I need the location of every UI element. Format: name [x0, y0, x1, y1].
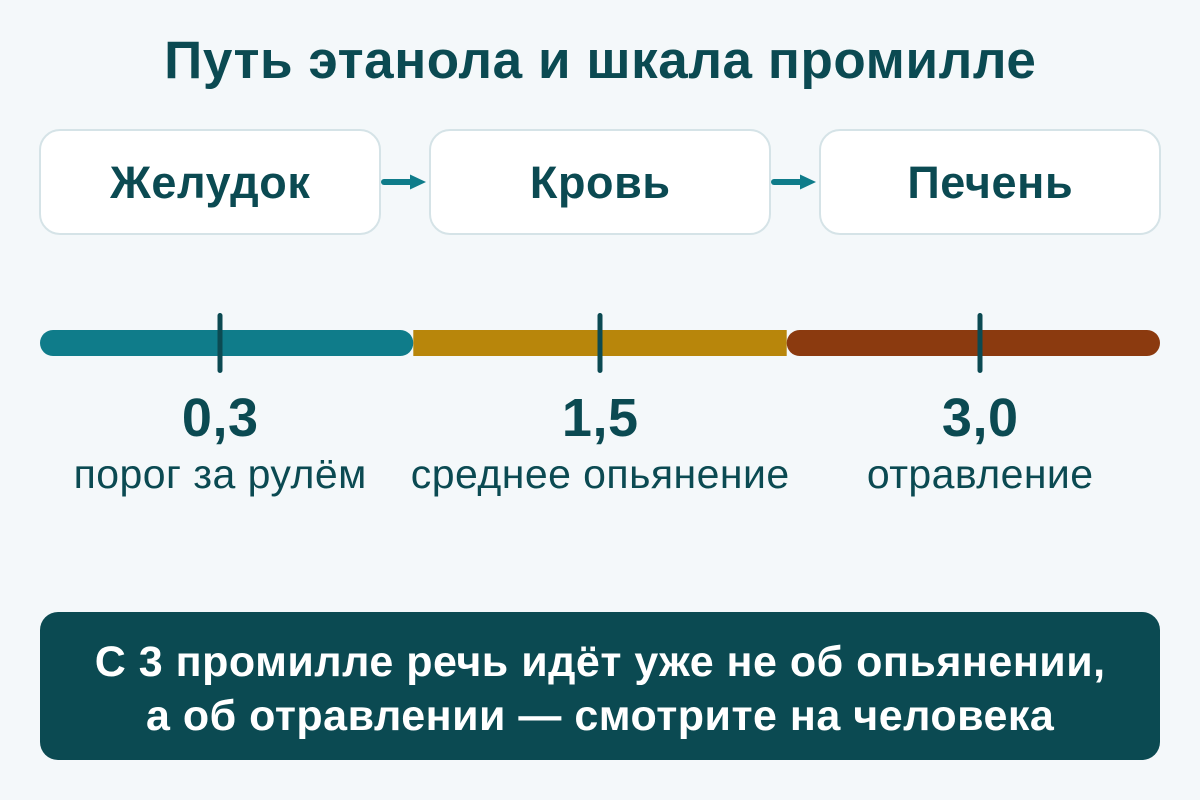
- arrow: blood to liver: [774, 174, 816, 190]
- segment: poisoning: [787, 330, 1160, 356]
- tick: 3,0: [978, 313, 982, 373]
- label: 1,5 moderate intoxication: среднее опьянение: [411, 451, 790, 497]
- promille scale bar: [40, 313, 1160, 373]
- box: liver: Печень: [907, 157, 1073, 208]
- label: 0,3 threshold: порог за рулём: [74, 451, 367, 497]
- segment: moderate: [413, 330, 787, 356]
- tick: 1,5: [598, 313, 602, 373]
- callout: [40, 612, 1160, 760]
- callout: а об отравлении — смотрите на человека: [146, 692, 1055, 740]
- label: 0,3 threshold: [74, 388, 367, 497]
- tick: 0,3: [218, 313, 222, 373]
- label: 1,5 moderate intoxication: 1,5: [562, 388, 638, 448]
- title: Путь этанола и шкала промилле: [164, 31, 1036, 90]
- label: 1,5 moderate intoxication: [411, 388, 790, 497]
- box: blood: [430, 130, 770, 234]
- box: stomach: [40, 130, 380, 234]
- arrow: stomach to blood: [384, 174, 426, 190]
- label: 3,0 poisoning: отравление: [867, 451, 1094, 497]
- segment: threshold: [40, 330, 413, 356]
- flow: ethanol path: [40, 130, 1160, 234]
- box: blood: Кровь: [530, 157, 671, 208]
- label: 3,0 poisoning: [867, 388, 1094, 497]
- label: 0,3 threshold: 0,3: [182, 388, 258, 448]
- box: stomach: Желудок: [109, 157, 310, 208]
- label: 3,0 poisoning: 3,0: [942, 388, 1018, 448]
- box: liver: [820, 130, 1160, 234]
- callout: С 3 промилле речь идёт уже не об опьянении,: [95, 638, 1106, 686]
